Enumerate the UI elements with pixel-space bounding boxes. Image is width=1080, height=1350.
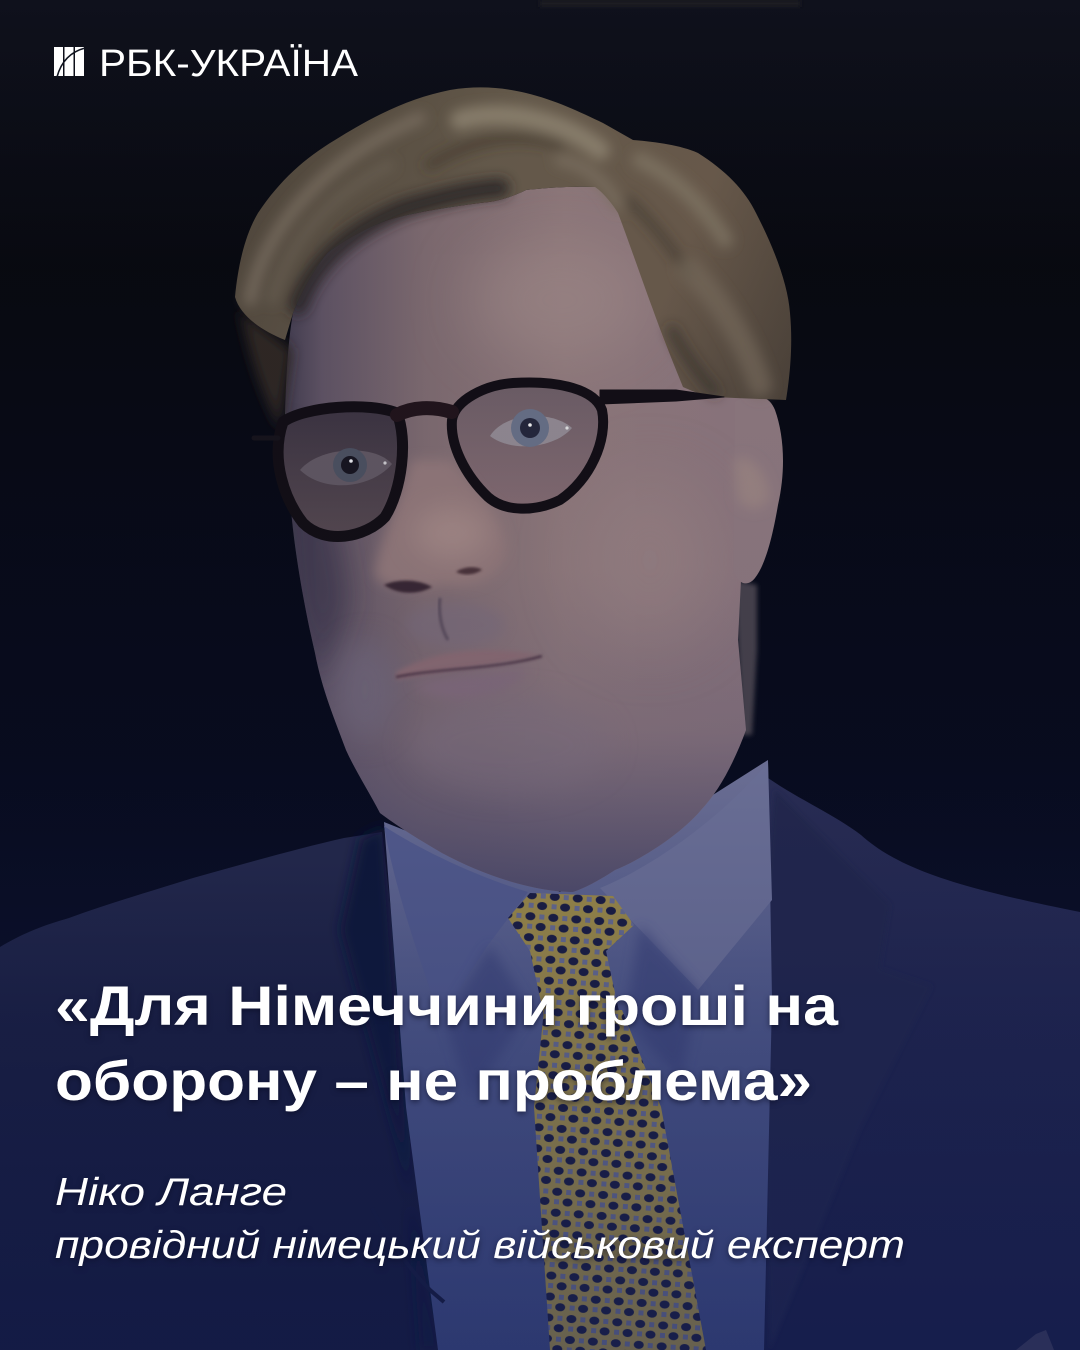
logo: РБК-Україна bbox=[54, 43, 359, 85]
jacket shadow near neck bbox=[340, 826, 440, 1350]
tie blade bbox=[534, 1010, 706, 1350]
jacket right lapel notch bbox=[760, 790, 932, 1350]
pocket square bbox=[1016, 1330, 1054, 1350]
bridge bbox=[397, 408, 452, 415]
necktie bbox=[508, 893, 706, 1350]
collar shadow bbox=[445, 925, 700, 1100]
shirt collar right bbox=[600, 762, 772, 990]
shirt bbox=[384, 760, 772, 1350]
left side hair fade bbox=[240, 310, 292, 430]
suit jacket right bbox=[700, 778, 1080, 1350]
suit jacket left bbox=[0, 832, 440, 1350]
right eye bbox=[490, 409, 572, 447]
cheek highlight bbox=[580, 475, 720, 645]
upper lip area bbox=[405, 603, 505, 647]
sideburn hair bbox=[735, 580, 757, 735]
attribution bbox=[55, 1171, 905, 1267]
logo mark bbox=[54, 47, 85, 77]
left hinge bbox=[254, 436, 278, 440]
hair bbox=[235, 87, 791, 400]
stubble area bbox=[410, 697, 610, 793]
right rim bbox=[452, 382, 603, 509]
left cheek shadow bbox=[293, 520, 358, 670]
mouth bbox=[396, 650, 542, 698]
headline line 2: оборону – не проблема» bbox=[55, 1049, 812, 1112]
shirt collar left bbox=[384, 826, 528, 1018]
left lens tint bbox=[278, 407, 403, 536]
left rim bbox=[278, 407, 403, 536]
forehead highlight bbox=[481, 258, 618, 342]
headline quote bbox=[55, 974, 839, 1112]
tie knot bbox=[508, 893, 634, 1016]
ear bbox=[733, 395, 783, 583]
headline line 1: «Для Німеччини гроші на bbox=[55, 974, 839, 1037]
microphone wire bbox=[372, 1208, 444, 1302]
face shading bbox=[280, 240, 760, 900]
speaker role: провідний німецький військовий експерт bbox=[55, 1224, 905, 1267]
speaker name: Ніко Ланге bbox=[55, 1171, 287, 1214]
glasses bbox=[254, 382, 724, 536]
logo wordmark: РБК-УКРАЇНА bbox=[99, 43, 359, 85]
top edge strip bbox=[540, 0, 800, 7]
nose bbox=[375, 460, 507, 593]
left smile-line highlight bbox=[335, 649, 385, 727]
hair highlights and shadows bbox=[250, 115, 760, 392]
face bbox=[285, 187, 748, 892]
right lens tint bbox=[452, 382, 603, 509]
left eye bbox=[300, 448, 392, 485]
nasolabial fold bbox=[439, 598, 448, 640]
lower face shading bbox=[351, 683, 746, 892]
temple arm bbox=[600, 390, 724, 404]
